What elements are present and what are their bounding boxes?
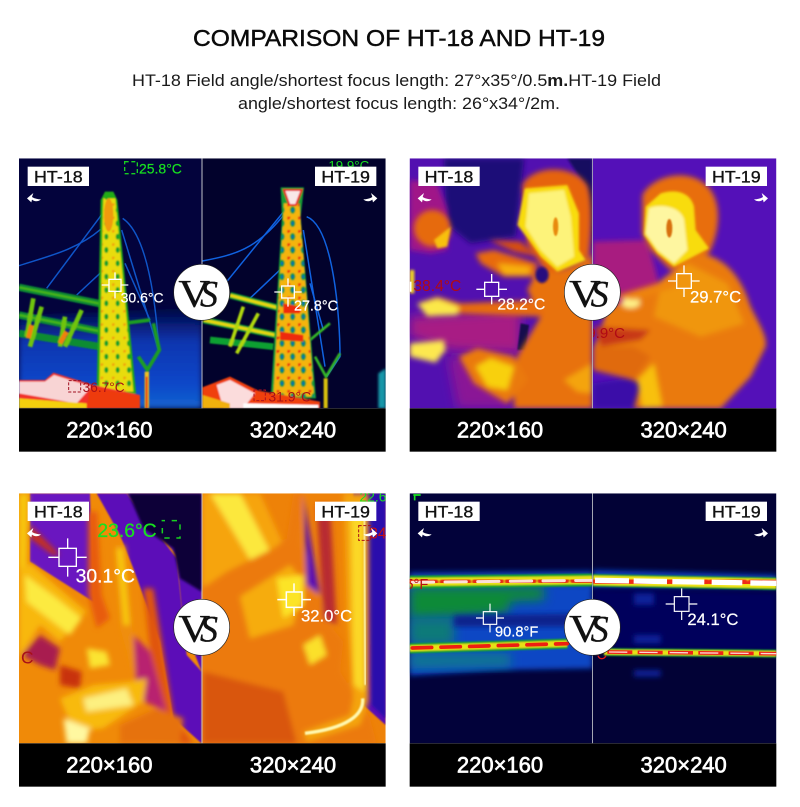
readouts on line images: 5°F <box>405 577 428 593</box>
label: HT-19: HT-19 <box>712 502 761 521</box>
divider line <box>201 158 203 408</box>
resolution bar: 220×160 <box>457 752 543 777</box>
HT-19 tower thermal image <box>202 158 386 408</box>
VS badge: V <box>178 609 210 651</box>
label: HT-19: HT-19 <box>321 502 370 521</box>
readouts on tower images: 36.7°C <box>83 380 125 395</box>
subtitle text: angle/shortest focus length: 26°x34°/2m. <box>238 94 560 113</box>
VS badge: S <box>591 275 609 316</box>
divider line <box>201 493 203 743</box>
VS badge <box>564 599 620 655</box>
resolution bar: 320×240 <box>641 417 727 442</box>
icon: right arrow <box>754 193 768 202</box>
resolution bar: 220×160 <box>66 417 152 442</box>
resolution bar: 320×240 <box>641 752 727 777</box>
readouts on pipes images: 30.1°C <box>76 566 135 587</box>
label: HT-18: HT-18 <box>34 502 83 521</box>
subtitle text: HT-18 Field angle/shortest focus length: 27°x35°/0.5 m.HT-19 Field <box>132 71 661 90</box>
HT-18 pipes thermal image <box>19 493 202 743</box>
icon: right arrow <box>363 193 377 202</box>
VS badge: S <box>200 275 218 316</box>
resolution bar: 320×240 <box>250 417 336 442</box>
readouts on tower images: 31.9°C <box>268 388 311 404</box>
resolution bar: 320×240 <box>250 752 336 777</box>
readouts on tower images: 27.8°C <box>294 298 338 314</box>
title: COMPARISON OF HT-18 AND HT-19 <box>193 25 605 51</box>
label: HT-18: HT-18 <box>425 167 473 186</box>
HT-19 pipes thermal image: 34 <box>369 525 387 542</box>
readouts on person images: 9.9°C <box>587 325 625 342</box>
VS badge: V <box>178 274 210 316</box>
divider line <box>591 493 594 743</box>
subtitle text <box>132 71 661 113</box>
label: HT-19: HT-19 <box>321 167 370 186</box>
resolution bar: 220×160 <box>66 752 152 777</box>
HT-19 pipes thermal image <box>202 489 402 743</box>
VS badge <box>174 599 230 655</box>
readouts on pipes images: C <box>21 648 34 668</box>
label: HT-18: HT-18 <box>34 167 83 186</box>
resolution bar <box>19 408 386 452</box>
readouts on tower images: 30.6°C <box>121 290 164 306</box>
label: HT-19: HT-19 <box>712 167 761 186</box>
readouts on person images: 38.4°C <box>413 278 461 295</box>
readouts on tower images: 25.8°C <box>139 160 182 176</box>
readouts on line images: 90.8°F <box>495 624 538 640</box>
icon: left arrow <box>418 193 432 202</box>
label: HT-18: HT-18 <box>425 502 473 521</box>
panel: person comparison <box>410 158 776 452</box>
readouts on line images: 24.1°C <box>687 610 738 629</box>
resolution bar <box>19 743 386 787</box>
VS badge <box>174 264 230 320</box>
icon: left arrow <box>27 528 41 537</box>
readouts on person images: 29.7°C <box>690 288 741 307</box>
readouts on person images <box>411 265 741 342</box>
VS badge: V <box>569 609 601 651</box>
HT-19 person thermal image <box>593 158 776 408</box>
readouts on tower images <box>69 160 338 404</box>
resolution bar <box>410 743 776 787</box>
icon: right arrow <box>754 528 768 537</box>
readouts on person images: 28.2°C <box>497 296 545 313</box>
icon: left arrow <box>418 528 432 537</box>
icon: right arrow <box>363 528 377 537</box>
readouts on pipes images <box>21 521 352 668</box>
VS badge <box>564 264 620 320</box>
VS badge: S <box>200 610 218 651</box>
green readout partly hidden: 19.9°C <box>328 158 370 173</box>
readouts on line images <box>405 495 738 640</box>
divider line <box>591 158 594 408</box>
HT-18 tower thermal image <box>19 158 202 408</box>
icon: left arrow <box>27 193 41 202</box>
readouts on pipes images: 23.6°C <box>97 521 157 542</box>
HT-19 pipes thermal image: 22.6°C <box>359 489 402 505</box>
readouts on pipes images: 32.0°C <box>301 606 352 625</box>
resolution bar <box>410 408 776 452</box>
HT-18 lines thermal image <box>410 493 592 743</box>
HT-18 person thermal image <box>410 158 592 408</box>
panel: power tower comparison <box>19 158 386 452</box>
VS badge: V <box>569 274 601 316</box>
VS badge: S <box>591 610 609 651</box>
panel: pipes comparison <box>19 489 402 787</box>
panel: heating lines comparison <box>405 493 776 787</box>
resolution bar: 220×160 <box>457 417 543 442</box>
HT-19 lines thermal image <box>593 493 776 743</box>
